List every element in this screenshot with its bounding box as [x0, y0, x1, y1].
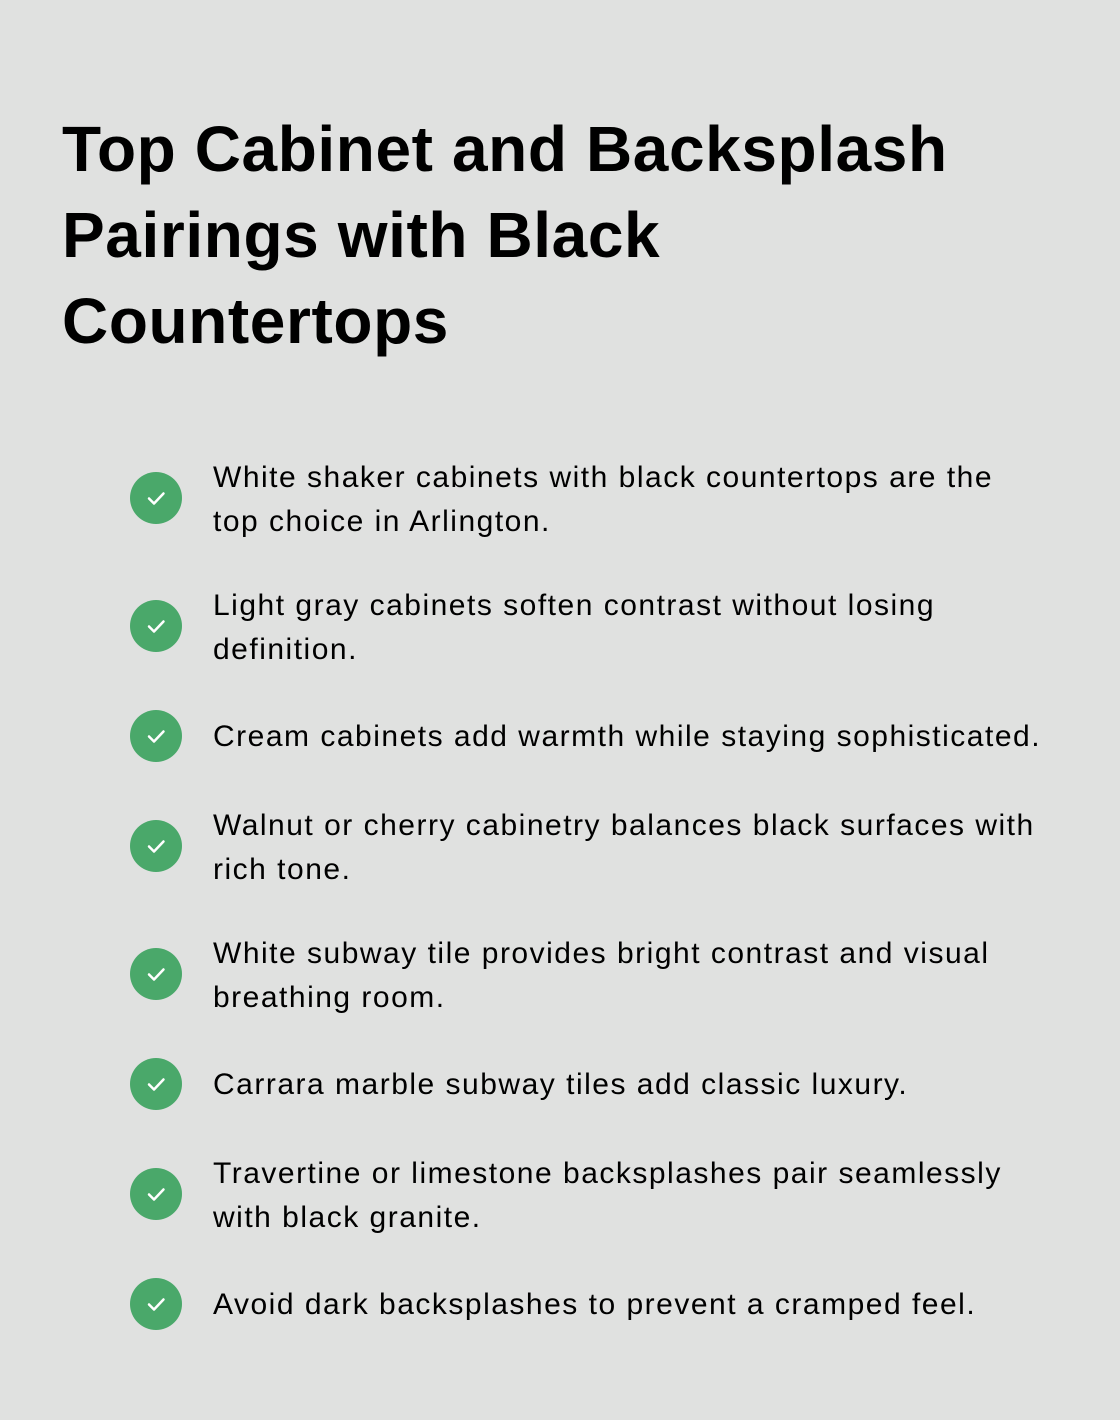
icon: check: [130, 820, 182, 872]
icon: check: [130, 710, 182, 762]
item 8: [130, 1278, 976, 1330]
text: Avoid dark backsplashes to prevent a cramped feel.: [213, 1288, 976, 1321]
icon: check: [130, 948, 182, 1000]
item 1: [130, 461, 993, 538]
item 4: [130, 809, 1035, 886]
text: Walnut or cherry cabinetry balances black surfaces with: [213, 809, 1035, 842]
text: [213, 461, 993, 538]
item 3: [130, 710, 1041, 762]
text: definition.: [213, 633, 358, 666]
item 7: [130, 1157, 1002, 1234]
icon: check: [130, 1058, 182, 1110]
title: Pairings with Black: [62, 199, 660, 271]
title: Top Cabinet and Backsplash: [62, 113, 948, 185]
text: [213, 589, 935, 666]
text: Light gray cabinets soften contrast without losing: [213, 589, 935, 622]
title: [62, 113, 948, 357]
text: [213, 1157, 1002, 1234]
text: Carrara marble subway tiles add classic luxury.: [213, 1068, 908, 1101]
text: Travertine or limestone backsplashes pair seamlessly: [213, 1157, 1002, 1190]
text: top choice in Arlington.: [213, 505, 551, 538]
text: Cream cabinets add warmth while staying sophisticated.: [213, 720, 1041, 753]
icon: check: [130, 1278, 182, 1330]
text: with black granite.: [213, 1201, 482, 1234]
text: rich tone.: [213, 853, 351, 886]
item 2: [130, 589, 935, 666]
icon: check: [130, 472, 182, 524]
text: [213, 937, 990, 1014]
text: White shaker cabinets with black countertops are the: [213, 461, 993, 494]
icon: check: [130, 1168, 182, 1220]
text: breathing room.: [213, 981, 446, 1014]
item 5: [130, 937, 990, 1014]
text: [213, 809, 1035, 886]
item 6: [130, 1058, 908, 1110]
text: White subway tile provides bright contrast and visual: [213, 937, 990, 970]
icon: check: [130, 600, 182, 652]
title: Countertops: [62, 285, 449, 357]
